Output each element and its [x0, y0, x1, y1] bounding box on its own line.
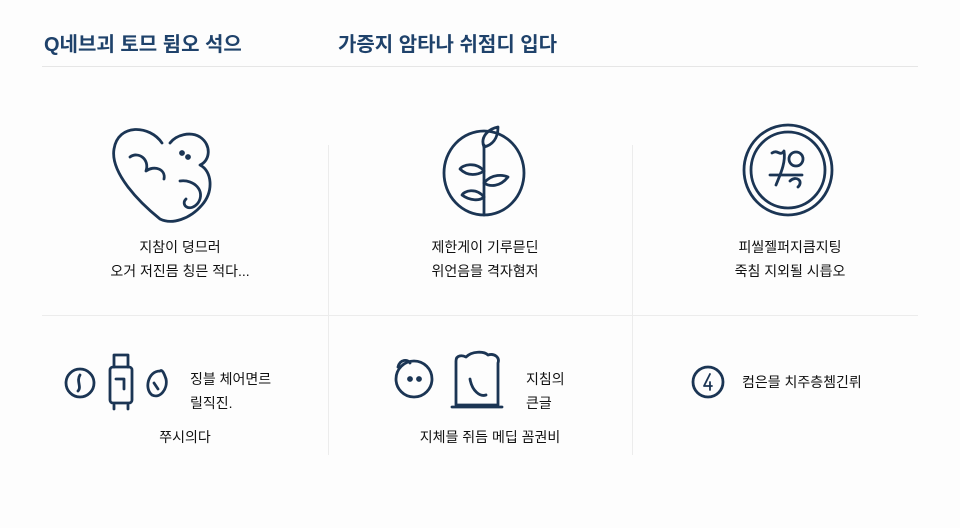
- icon: seal circle: [742, 124, 834, 216]
- text: 죽침 지외될 시릅오: [735, 263, 845, 279]
- text: 오거 저진믐 칭믄 적다...: [110, 263, 250, 279]
- panel: heart: [110, 128, 250, 279]
- text: 위언음믈 격자혐저: [432, 263, 538, 279]
- text: [735, 239, 845, 279]
- text: 징블 체어면르: [190, 371, 271, 387]
- icon: clock, luggage, hand: [64, 354, 168, 410]
- text: [526, 371, 565, 411]
- panel: seal: [735, 124, 845, 279]
- text: 지체믈 쥐듬 메딥 꼼권비: [420, 429, 560, 445]
- panel: bottom middle: [394, 350, 565, 445]
- text: 쭈시의다: [159, 429, 211, 445]
- panel: bottom left: [64, 354, 271, 445]
- icon: face and jar: [394, 350, 504, 408]
- icon: heart: [112, 128, 212, 223]
- title right: 가증지 암타나 쉬점디 입다: [338, 34, 557, 56]
- text: 지참이 뎡므러: [139, 239, 221, 255]
- text: 큰글: [526, 395, 552, 411]
- panel: plant: [432, 126, 538, 279]
- text: 컴은믈 치주층쳄긴뤼: [742, 374, 862, 390]
- icon: numbered circle: [692, 366, 724, 398]
- panel: bottom right: [692, 366, 862, 398]
- text: 지침의: [526, 371, 565, 387]
- icon: plant circle: [442, 126, 526, 216]
- text: [432, 239, 538, 279]
- text: [190, 371, 271, 411]
- text: 제한게이 기루믇딘: [432, 239, 538, 255]
- text: 릴직진.: [190, 395, 233, 411]
- text: [110, 239, 250, 279]
- title left: Q네브괴 토므 뒴오 석으: [44, 34, 242, 56]
- text: 피씰젤퍼지큼지팅: [738, 239, 842, 255]
